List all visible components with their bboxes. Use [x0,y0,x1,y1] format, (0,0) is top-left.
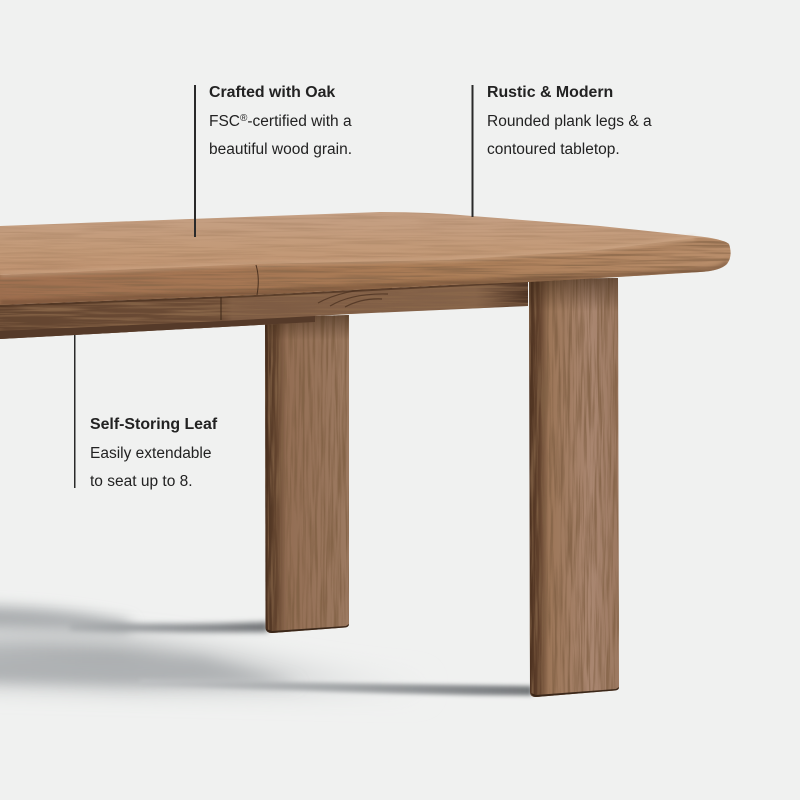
text: self-storing leaf [90,416,218,490]
text: crafted with oak: beautiful wood grain. [209,141,352,158]
text: rustic and modern: contoured tabletop. [487,141,620,158]
text: crafted with oak: FSC®-certified with a [209,112,352,130]
table photo illustration [0,85,731,701]
text: rustic and modern: Rounded plank legs & a [487,112,652,130]
text: crafted with oak: Crafted with Oak [209,84,335,101]
text: rustic and modern [487,84,652,158]
tabletop surface [0,212,722,275]
back leg [262,312,352,637]
text: rustic and modern: Rustic & Modern [487,84,613,101]
callout line: self-storing leaf [74,335,76,488]
text: self-storing leaf: Easily extendable [90,444,212,462]
text: crafted with oak [209,84,352,158]
text: self-storing leaf: to seat up to 8. [90,473,193,490]
tabletop edge [0,235,734,307]
callout line: crafted with oak [194,85,196,237]
text: self-storing leaf: Self-Storing Leaf [90,416,217,433]
floor shadows [0,606,532,696]
front leg [526,275,622,700]
callout line: rustic and modern [472,85,474,217]
apron [0,280,530,342]
